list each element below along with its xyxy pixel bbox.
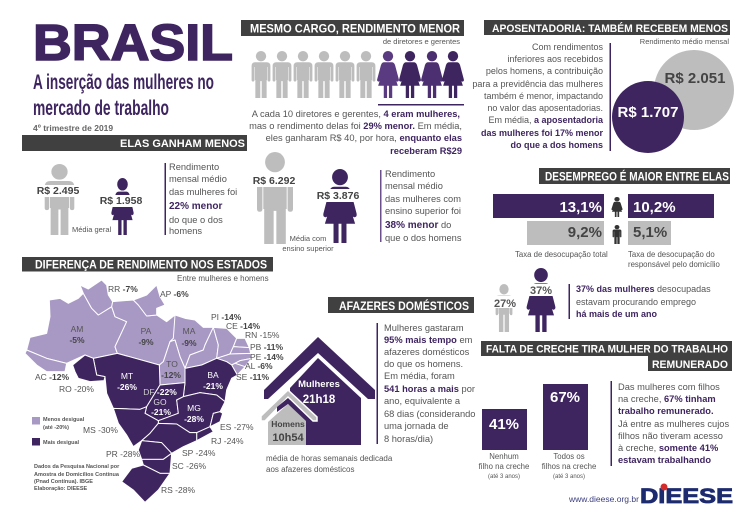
text block: uma jornada de (384, 421, 449, 431)
state labels inside map: -12% (161, 370, 181, 380)
text block: mensal médio (169, 174, 227, 184)
values: 27% (494, 298, 516, 310)
caption: média de horas semanais dedicada (266, 454, 393, 463)
text block: Em média, a aposentadoria (488, 115, 604, 125)
values: 37% (530, 285, 552, 297)
panel: mesmo cargo (241, 20, 464, 253)
label: Média geral (72, 225, 112, 234)
icon: man (34, 164, 84, 235)
state labels outside map: SE -11% (236, 372, 270, 382)
text block: para a previdência das mulheres (472, 79, 603, 89)
chart: circles: R$ 2.051 (665, 70, 725, 87)
text block: mensal médio (385, 181, 443, 191)
icon: man 27% (490, 284, 520, 332)
text block: inferiores aos recebidos (507, 54, 603, 64)
values (494, 285, 552, 310)
labels (515, 250, 721, 269)
labels: Taxa de desocupação do (628, 250, 715, 259)
bar chart: 67% (550, 389, 580, 406)
state labels outside map: PB -11% (250, 342, 284, 352)
state labels inside map: AM (71, 324, 83, 334)
text block: trabalho remunerado. (618, 406, 714, 416)
icon: woman (96, 178, 146, 235)
text block: do que o dos (169, 215, 223, 225)
bar chart (493, 194, 714, 245)
state labels inside map: -26% (117, 382, 137, 392)
source note: Elaboração: DIEESE (34, 486, 88, 492)
legend: Menos desigual (43, 417, 85, 423)
chart: circles: R$ 1.707 (618, 104, 678, 121)
text block: filhos não tiveram acesso (618, 431, 723, 441)
bar chart: 13,1% (559, 199, 602, 216)
text block: do que a dos homens (510, 140, 603, 150)
heading: FALTA DE CRECHE TIRA MULHER DO TRABALHO (486, 344, 728, 356)
text block: na creche, 67% tinham (618, 394, 716, 404)
text block: Rendimento (385, 169, 435, 179)
text block: estavam trabalhando (618, 455, 711, 465)
text block: 22% menor (169, 201, 222, 212)
state labels outside map: RO -20% (59, 384, 94, 394)
text block: também é menor, impactando (484, 91, 603, 101)
panel: falta de creche (479, 341, 732, 480)
state labels outside map: SP -24% (182, 448, 216, 458)
text block: que o dos homens (385, 233, 462, 243)
icon: woman (311, 169, 365, 243)
heading (328, 297, 474, 313)
icons: four women (377, 51, 464, 106)
text block: do que os homens. (384, 359, 463, 369)
icon: man (248, 152, 302, 244)
text block: Rendimento (169, 162, 219, 172)
state labels outside map: SC -26% (172, 461, 206, 471)
heading: APOSENTADORIA: TAMBÉM RECEBEM MENOS (492, 22, 728, 35)
source note (34, 464, 120, 492)
heading: DIFERENÇA DE RENDIMENTO NOS ESTADOS (35, 260, 267, 272)
label (282, 234, 334, 253)
heading (481, 341, 732, 371)
state labels inside map: TO (166, 359, 178, 369)
text block: receberam R$29 (390, 146, 462, 156)
labels: (até 3 anos) (553, 474, 585, 480)
panel: desemprego (490, 168, 730, 332)
text block: Com rendimentos (532, 42, 603, 52)
state labels inside map (69, 324, 223, 424)
state labels inside map: -5% (69, 335, 85, 345)
bar chart (482, 384, 588, 450)
text block: Das mulheres com filhos (618, 382, 720, 392)
heading (539, 168, 730, 184)
text block: 38% menor do (385, 220, 451, 231)
state labels inside map: DF -22% (143, 387, 177, 397)
legend: (até -20%) (43, 425, 69, 431)
text block: mas o rendimento delas foi 29% menor. Em média, (249, 121, 462, 131)
caption: de diretores e gerentes (383, 37, 460, 46)
text block: Em média, foram (384, 371, 455, 381)
state labels outside map: PI -14% (211, 312, 242, 322)
text block (380, 169, 462, 243)
labels: filho na creche (479, 462, 529, 471)
panel: aposentadoria (472, 20, 734, 153)
state labels inside map: MA (183, 326, 196, 336)
legend: Mais desigual (43, 440, 80, 446)
heading: DESEMPREGO É MAIOR ENTRE ELAS (545, 170, 729, 184)
panel: diferença nos estados (22, 257, 284, 502)
caption: aos afazeres domésticos (266, 465, 354, 474)
legend (32, 417, 85, 446)
state labels inside map: MG (187, 403, 201, 413)
icon: woman (611, 197, 623, 217)
text block (610, 381, 729, 466)
icon: woman 37% (526, 268, 556, 332)
labels: Todos os (553, 452, 585, 461)
heading (22, 135, 247, 151)
state labels outside map: AC -12% (35, 372, 69, 382)
icon: houses: Mulheres (298, 379, 340, 390)
state labels inside map: GO (153, 397, 167, 407)
map of Brazil (25, 280, 252, 502)
heading: AFAZERES DOMÉSTICOS (339, 300, 469, 313)
labels: responsável pelo domicílio (628, 260, 721, 269)
text block: Já entre as mulheres cujos (618, 419, 729, 429)
state labels outside map (35, 284, 284, 495)
state labels outside map: AL -6% (245, 361, 273, 371)
icon: man (613, 225, 621, 244)
text block: à creche, somente 41% (618, 443, 719, 453)
values (37, 185, 142, 207)
text block: estavam procurando emprego (576, 297, 696, 307)
label: ensino superior (282, 244, 334, 253)
text block (472, 42, 604, 150)
text block (376, 323, 475, 444)
state labels outside map: ES -27% (220, 422, 254, 432)
labels: Nenhum (489, 452, 519, 461)
state labels inside map: -21% (203, 381, 223, 391)
values: R$ 3.876 (317, 190, 359, 202)
text block: 95% mais tempo em (384, 335, 473, 345)
state labels inside map: -21% (151, 407, 171, 417)
panel: elas ganham menos (22, 135, 247, 236)
heading: ELAS GANHAM MENOS (120, 138, 245, 150)
state labels outside map: RS -28% (161, 485, 195, 495)
text block (568, 284, 711, 319)
text block: há mais de um ano (576, 309, 658, 319)
subtitle (33, 71, 214, 120)
chart: circles (612, 50, 734, 153)
state labels outside map: PR -28% (106, 449, 140, 459)
text block: 8 horas/dia) (384, 434, 433, 444)
state labels inside map: PA (141, 326, 152, 336)
subtitle: A inserção das mulheres no (33, 71, 214, 94)
text block: ensino superior foi (385, 206, 461, 216)
state labels outside map: PE -14% (250, 352, 284, 362)
panel: afazeres domésticos (261, 297, 475, 474)
source note: Amostra de Domicílios Contínua (34, 472, 120, 478)
state labels inside map: MT (121, 371, 133, 381)
values: R$ 2.495 (37, 185, 79, 197)
text block: das mulheres foi 17% menor (481, 128, 603, 138)
caption: Rendimento médio mensal (640, 37, 729, 46)
text block: homens (169, 226, 202, 236)
state labels inside map: -9% (138, 337, 154, 347)
state labels outside map: RN -15% (245, 330, 280, 340)
values: R$ 6.292 (253, 175, 295, 187)
state labels outside map: MS -30% (83, 425, 118, 435)
period: 4º trimestre de 2019 (33, 123, 113, 133)
text block: pelos homens, a contribuição (486, 66, 603, 76)
heading: REMUNERADO (652, 359, 728, 371)
icon: houses: 21h18 (303, 394, 336, 406)
text block: eles ganharam R$ 40, por hora, enquanto elas (266, 133, 462, 143)
text block: afazeres domésticos (384, 347, 470, 357)
logo: DIEESE (640, 485, 733, 508)
bar chart: 5,1% (633, 224, 667, 241)
text block: 541 horas a mais por (384, 384, 475, 394)
state labels outside map: CE -14% (226, 321, 260, 331)
caption: Entre mulheres e homens (177, 274, 269, 283)
icon: houses: 10h54 (272, 432, 304, 444)
icons: six men (252, 51, 375, 98)
state labels inside map: BA (207, 370, 219, 380)
caption (266, 454, 393, 474)
heading: MESMO CARGO, RENDIMENTO MENOR (250, 24, 461, 36)
bar chart: 9,2% (568, 224, 602, 241)
icon: houses (261, 337, 375, 445)
text block (164, 162, 237, 236)
labels: Taxa de desocupação total (515, 250, 608, 259)
source note: (Pnad Contínua). IBGE (34, 479, 93, 485)
state labels outside map: RR -7% (108, 284, 138, 294)
values: R$ 1.958 (100, 195, 142, 207)
label: Média com (290, 234, 326, 243)
title: BRASIL (33, 14, 233, 71)
state labels inside map: -28% (184, 414, 204, 424)
website: www.dieese.org.br (568, 494, 639, 504)
bar chart: 41% (489, 416, 519, 433)
state labels outside map: AP -6% (160, 289, 189, 299)
values (253, 175, 359, 202)
subtitle: mercado de trabalho (33, 97, 169, 120)
labels: filhos na creche (542, 462, 596, 471)
labels (479, 452, 596, 480)
text block: Mulheres gastaram (384, 323, 464, 333)
text block: 68 dias (considerando (384, 409, 475, 419)
text block (249, 109, 462, 156)
text block: ano, equivalente a (384, 396, 461, 406)
text block: A cada 10 diretores e gerentes, 4 eram mulheres, (252, 109, 460, 119)
icon: houses: Homens (271, 419, 305, 429)
state labels outside map: RJ -24% (211, 436, 244, 446)
state labels inside map: -9% (181, 338, 197, 348)
text block: no valor das aposentadorias. (487, 103, 603, 113)
text block: das mulheres com (385, 194, 461, 204)
text block: das mulheres foi (169, 187, 237, 197)
text block: 37% das mulheres desocupadas (576, 284, 711, 294)
bar chart: 10,2% (633, 199, 676, 216)
source note: Dados da Pesquisa Nacional por (34, 464, 120, 470)
labels: (até 3 anos) (488, 474, 520, 480)
